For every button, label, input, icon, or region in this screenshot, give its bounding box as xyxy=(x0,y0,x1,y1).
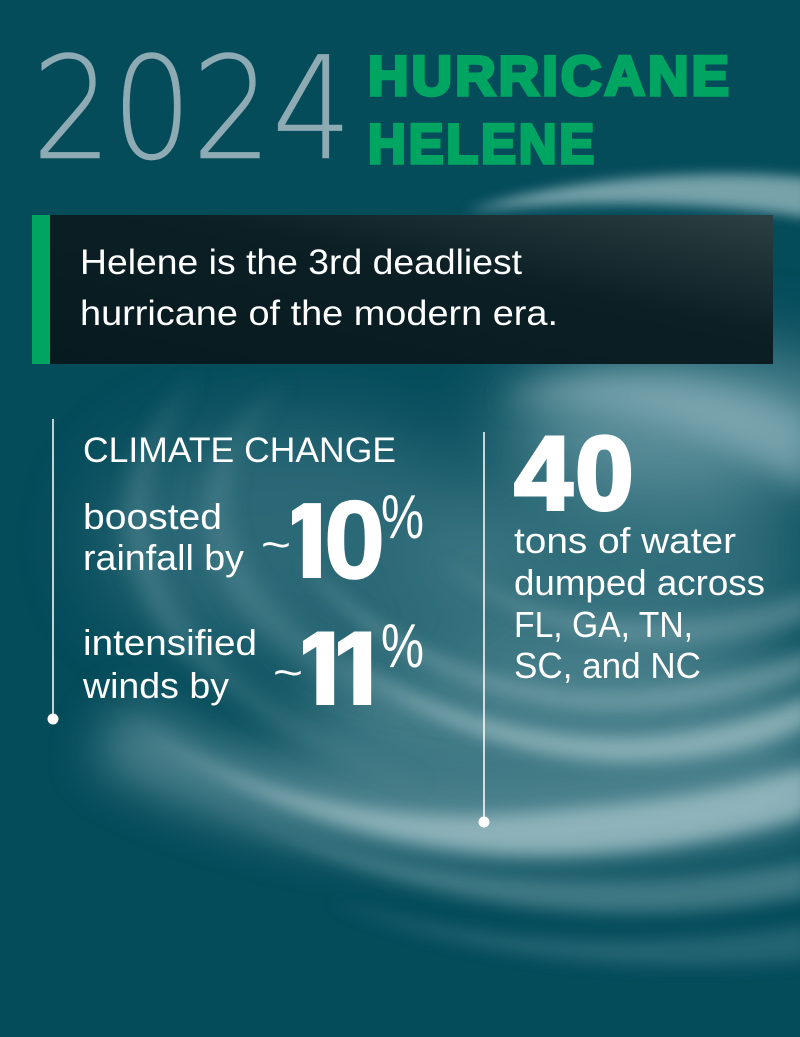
wind statistic: intensified xyxy=(83,622,257,663)
rainfall statistic: 1 xyxy=(272,475,345,622)
rainfall statistic xyxy=(86,495,422,580)
water description: dumped across xyxy=(514,562,765,603)
banner background xyxy=(32,215,773,364)
callout banner xyxy=(32,215,773,364)
rainfall statistic: ~ xyxy=(261,521,291,568)
water description: SC, and NC xyxy=(514,645,701,686)
panel: water total xyxy=(478,416,765,828)
panel: climate change xyxy=(48,419,424,749)
rainfall statistic: boosted xyxy=(83,496,222,537)
wind statistic: 1 xyxy=(323,603,395,749)
rainfall statistic: 0 xyxy=(324,479,385,602)
rainfall statistic: rainfall by xyxy=(83,537,244,578)
wind statistic: ~ xyxy=(273,649,303,696)
wind statistic: winds by xyxy=(82,665,229,706)
left timeline line and dot xyxy=(48,419,58,724)
year: 2024 xyxy=(32,27,352,192)
banner text: Helene is the 3rd deadliest xyxy=(80,243,522,282)
water description: FL, GA, TN, xyxy=(514,604,693,645)
heading: hurricane name: HELENE xyxy=(368,112,597,175)
wind statistic xyxy=(83,624,422,706)
green accent bar xyxy=(32,215,50,364)
banner text: hurricane of the modern era. xyxy=(80,294,558,333)
heading: hurricane name: HURRICANE xyxy=(368,44,732,107)
water description: tons of water xyxy=(514,520,736,561)
title xyxy=(32,27,732,192)
wind statistic: % xyxy=(381,612,424,681)
wind statistic: 1 xyxy=(286,603,358,749)
right timeline line and dot xyxy=(478,432,490,828)
big number: 40 xyxy=(514,416,633,532)
rainfall statistic: % xyxy=(381,483,424,552)
water description xyxy=(514,520,765,686)
heading: hurricane name xyxy=(368,44,732,175)
climate change heading: CLIMATE CHANGE xyxy=(83,431,396,470)
banner text xyxy=(80,243,558,333)
